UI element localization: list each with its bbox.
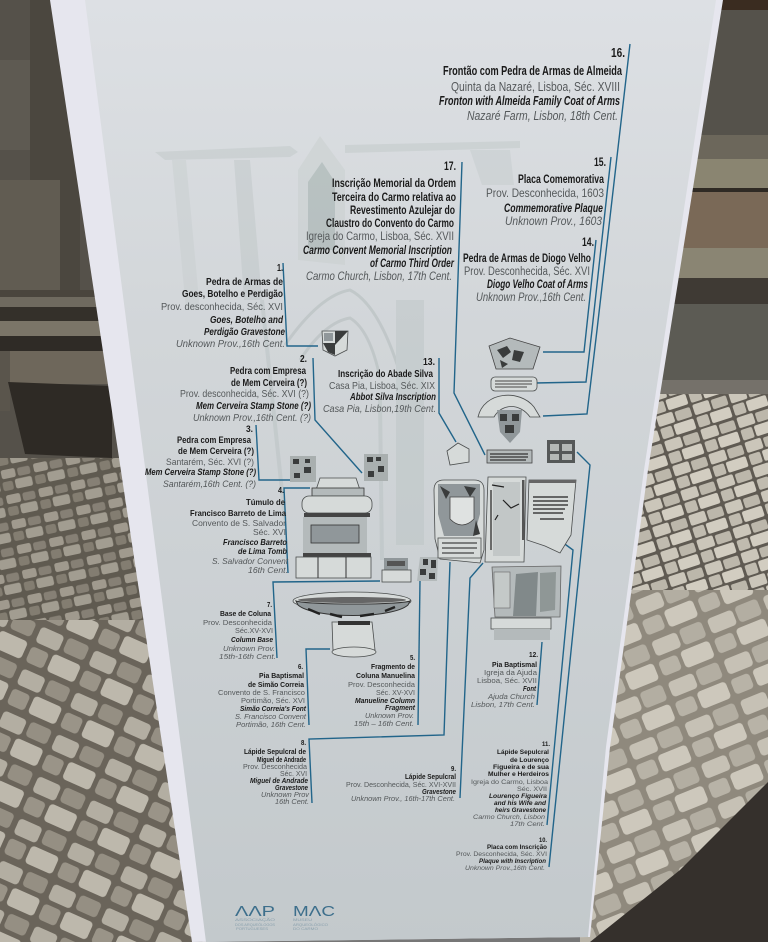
logo: MAC: MΛC [293,903,335,920]
object 2: stamp stone [364,454,388,481]
text: item 17: Terceira do Carmo relativa ao [332,190,456,204]
text: item 17 [303,159,456,283]
text: item 8: Miguel de Andrade [257,757,306,764]
text: item 13: Inscrição do Abade Silva [338,368,433,380]
text: item 17: of Carmo Third Order [370,256,455,270]
text: item 9: Gravestone [422,789,456,796]
text: item 1: Perdigão Gravestone [204,326,285,338]
text: item 7: Column Base [231,635,273,644]
text: item 1: Goes, Botelho and [210,314,283,326]
object 14: Diogo Velho coat of arms [489,338,540,369]
text: item 10: Placa com Inscrição [487,844,547,851]
text: item 4: Francisco Barreto [223,537,287,547]
text: item 2: Unknown Prov.,16th Cent. (?) [193,413,311,424]
text: item 11: 17th Cent. [510,821,545,828]
object 15: commemorative plaque [491,377,537,391]
text: item 11 [471,741,550,828]
text: item 2 [180,354,312,424]
text: item 7: Séc.XV-XVI [235,626,273,635]
logo: AAP: ΛΛP [235,903,275,920]
text: item 17: Igreja do Carmo, Lisboa, Séc. XVII [306,229,454,243]
text: item 16: 16. [611,45,625,60]
text: item 6: Portimão, 16th Cent. [236,720,306,729]
text: item 11: Figueira e de sua [493,764,549,771]
text: item 14 [463,237,594,304]
text: item 10: Unknown Prov.,16th Cent. [465,865,545,872]
text: item 4 [190,485,289,575]
text: item 9: 9. [451,766,456,773]
text: item 3: Mem Cerveira Stamp Stone (?) [145,467,256,478]
logo: MAC: DO CARMO [293,927,318,931]
text: item 12: Igreja da Ajuda [484,668,538,677]
text: item 4: 16th Cent. [248,565,288,575]
text: item 13: Casa Pia, Lisbon,19th Cent. [323,403,436,415]
text: item 11: and his Wife and [494,800,547,807]
background: cobblestone pavement left [0,458,210,942]
text: item 16: Fronton with Almeida Family Coat of Arms [439,93,620,108]
text: item 11: 11. [542,741,550,748]
text: item 15: Unknown Prov., 1603 [505,214,602,228]
text: item 14: Diogo Velho Coat of Arms [487,279,588,291]
text: item 12: 12. [529,650,538,659]
text: item 13: 13. [423,356,435,368]
text: item 1: Unknown Prov.,16th Cent. [176,338,285,350]
text: item 7: 7. [267,600,272,609]
text: item 8: Lápide Sepulcral de [244,749,306,756]
text: item 17: Revestimento Azulejar do [350,203,455,217]
text: item 4: de Lima Tomb [238,546,287,556]
text: item 3: Santarém,16th Cent. (?) [163,479,256,490]
text: item 5: Manueline Column [355,696,415,705]
text: item 8: Prov. Desconhecida [243,764,307,771]
text: item 5: 5. [410,653,415,662]
text: item 15: Placa Comemorativa [518,172,604,186]
object 12: baptismal font fragment [491,566,561,640]
text: item 9: Unknown Prov., 16th-17th Cent. [351,796,455,803]
background: left stone wall [0,0,160,460]
logo: AAP: PORTUGUESES [236,927,269,931]
text: item 11: Lápide Sepulcral [497,749,549,756]
text: item 17: Carmo Convent Memorial Inscription [303,243,452,257]
text: item 2: 2. [300,354,307,365]
text: item 15: 15. [594,155,606,169]
text: item 4: 4. [278,485,284,495]
text: item 6: Simão Correia's Font [240,704,306,713]
text: item 6: 6. [298,662,303,671]
text: item 14: Unknown Prov.,16th Cent. [476,292,586,304]
background: cobblestone pavement right [580,394,768,942]
text: item 7: 15th-16th Cent. [219,652,276,661]
text: item 17: Inscrição Memorial da Ordem [332,176,456,190]
text: item 12 [471,650,538,709]
text: item 10: Prov. Desconhecida, Séc. XVI [456,851,547,858]
object 3: stamp stone [290,456,316,482]
text: item 1: 1. [277,262,283,274]
text: item 11: Igreja do Carmo, Lisboa [471,779,548,786]
text: item 16 [439,45,625,123]
text: item 3: Santarém, Séc. XVI (?) [166,457,254,468]
text: item 2: Pedra com Empresa [230,366,306,377]
text: item 12: Lisbon, 17th Cent. [471,700,535,709]
text: item 4: Francisco Barreto de Lima [190,508,286,518]
text: item 12: Lisboa, Séc. XVII [477,676,537,685]
text: item 8: Miguel de Andrade [250,778,308,785]
text: item 5: Unknown Prov. [365,711,414,720]
text: item 12: Ajuda Church [487,692,535,701]
text: item 2: Mem Cerveira Stamp Stone (?) [196,401,312,412]
text: item 3: Pedra com Empresa [177,435,252,446]
logo: AAP: ASSOCIAÇÃO [235,917,275,922]
logo: MAC: ARQUEOLÓGICO [293,922,328,927]
logo: MAC: MUSEU [293,918,313,922]
text: item 8: Séc. XVI [280,771,307,778]
text: item 15: Prov. Desconhecida, 1603 [486,186,604,200]
text: item 13: Casa Pia, Lisboa, Séc. XIX [329,380,435,392]
text: item 9 [346,766,456,803]
text: item 12: Font [523,684,536,693]
text: item 6: Pia Baptismal [259,671,304,680]
text: item 5: 15th – 16th Cent. [354,719,414,728]
text: item 11: Lourenço Figueira [489,793,547,800]
text: item 11: heirs Gravestone [495,807,546,814]
object 16: Almeida fronton [478,395,540,443]
text: item 6: de Simão Correia [248,680,305,689]
object 8: Miguel de Andrade gravestone [434,480,484,563]
text: item 17: Claustro do Convento do Carmo [326,216,454,230]
text: item 1: Pedra de Armas de [206,276,283,288]
text: item 3: 3. [246,424,253,435]
object 13: Abbot Silva inscription [447,443,469,465]
text: item 5: Séc. XV-XVI [376,688,415,697]
text: item 1 [161,262,285,350]
text: item 11: Mulher e Herdeiros [488,771,549,778]
text: item 11: de Lourenço [510,757,549,764]
text: item 3 [145,424,256,490]
object 11: Lourenço Figueira gravestone [527,480,576,553]
text: item 14: Prov. Desconhecida, Séc. XVI [464,266,590,278]
text: item 10: Plaque with Inscription [479,858,546,865]
illustration: faint sketch of the Carmo church ruins [155,136,520,560]
text: item 4: S. Salvador Convent [212,556,289,566]
background: right stone wall [640,0,768,395]
text: item 4: Convento de S. Salvador [192,518,286,528]
text: item 13 [323,356,436,415]
text: item 2: de Mem Cerveira (?) [231,378,307,389]
text: item 12: Pia Baptismal [492,660,537,669]
text: item 8: 16th Cent. [275,799,309,806]
text: item 15 [486,155,606,228]
text: item 2: Prov. desconhecida, Séc. XVI (?) [180,389,309,400]
text: item 17: 17. [444,159,456,173]
object 5: Manueline column fragment [417,557,438,581]
text: item 7: Prov. Desconhecida [203,618,273,627]
text: item 3: de Mem Cerveira (?) [178,446,254,457]
text: item 6 [218,662,307,729]
text: item 10: 10. [539,837,547,844]
text: item 11: Carmo Church, Lisbon [473,814,545,821]
text: item 9: Prov. Desconhecida, Séc. XVI-XVII [346,782,456,789]
text: item 16: Nazaré Farm, Lisbon, 18th Cent. [467,108,618,123]
text: item 6: Portimão, Séc. XVI [241,696,305,705]
logo: MAC [293,903,335,931]
text: item 5: Fragment [385,703,415,712]
object 4: tomb [296,478,372,578]
text: item 7: Base de Coluna [220,609,272,618]
object 17: Carmo memorial inscription [487,450,532,463]
text: item 13: Abbot Silva Inscription [349,391,436,403]
text: item 8: Unknown Prov [261,792,310,799]
text: item 16: Frontão com Pedra de Armas de Almeida [443,63,623,78]
leader lines [256,44,630,867]
text: item 17: Carmo Church, Lisbon, 17th Cent. [306,269,452,283]
text: item 5: Prov. Desconhecida [348,680,416,689]
text: item 10 [456,837,547,872]
text: item 4: Túmulo de [246,497,285,507]
text: item 11: Séc. XVII [517,786,547,793]
text: item 9: Lápide Sepulcral [405,774,456,781]
text: item 7 [203,600,276,661]
object 7: column base [382,558,411,582]
text: item 14: 14. [582,237,594,249]
text: item 7: Unknown Prov. [223,644,275,653]
text: item 8: 8. [301,740,306,747]
text: item 8: Gravestone [275,785,308,792]
text: item 6: S. Francisco Convent [235,712,307,721]
text: item 5: Coluna Manuelina [356,671,416,680]
text: item 8 [243,740,310,806]
text: item 5: Fragmento de [371,662,415,671]
text: item 1: Goes, Botelho e Perdigão [182,288,283,300]
text: item 14: Pedra de Armas de Diogo Velho [463,253,591,265]
logo: AAP: DOS ARQUEÓLOGOS [235,922,276,927]
logo: AAP [235,903,276,931]
text: item 6: Convento de S. Francisco [218,688,305,697]
object 1: coat of arms [322,331,348,356]
text: item 1: Prov. desconhecida, Séc. XVI [161,301,283,313]
text: item 16: Quinta da Nazaré, Lisboa, Séc. XVIII [451,79,620,94]
text: item 4: Séc. XVI [253,527,286,537]
object 6: baptismal font [293,592,411,657]
object 10: plaque with inscription [547,440,575,463]
object 9: gravestone [485,477,526,562]
text: item 15: Commemorative Plaque [504,201,603,215]
text: item 5 [348,653,416,728]
